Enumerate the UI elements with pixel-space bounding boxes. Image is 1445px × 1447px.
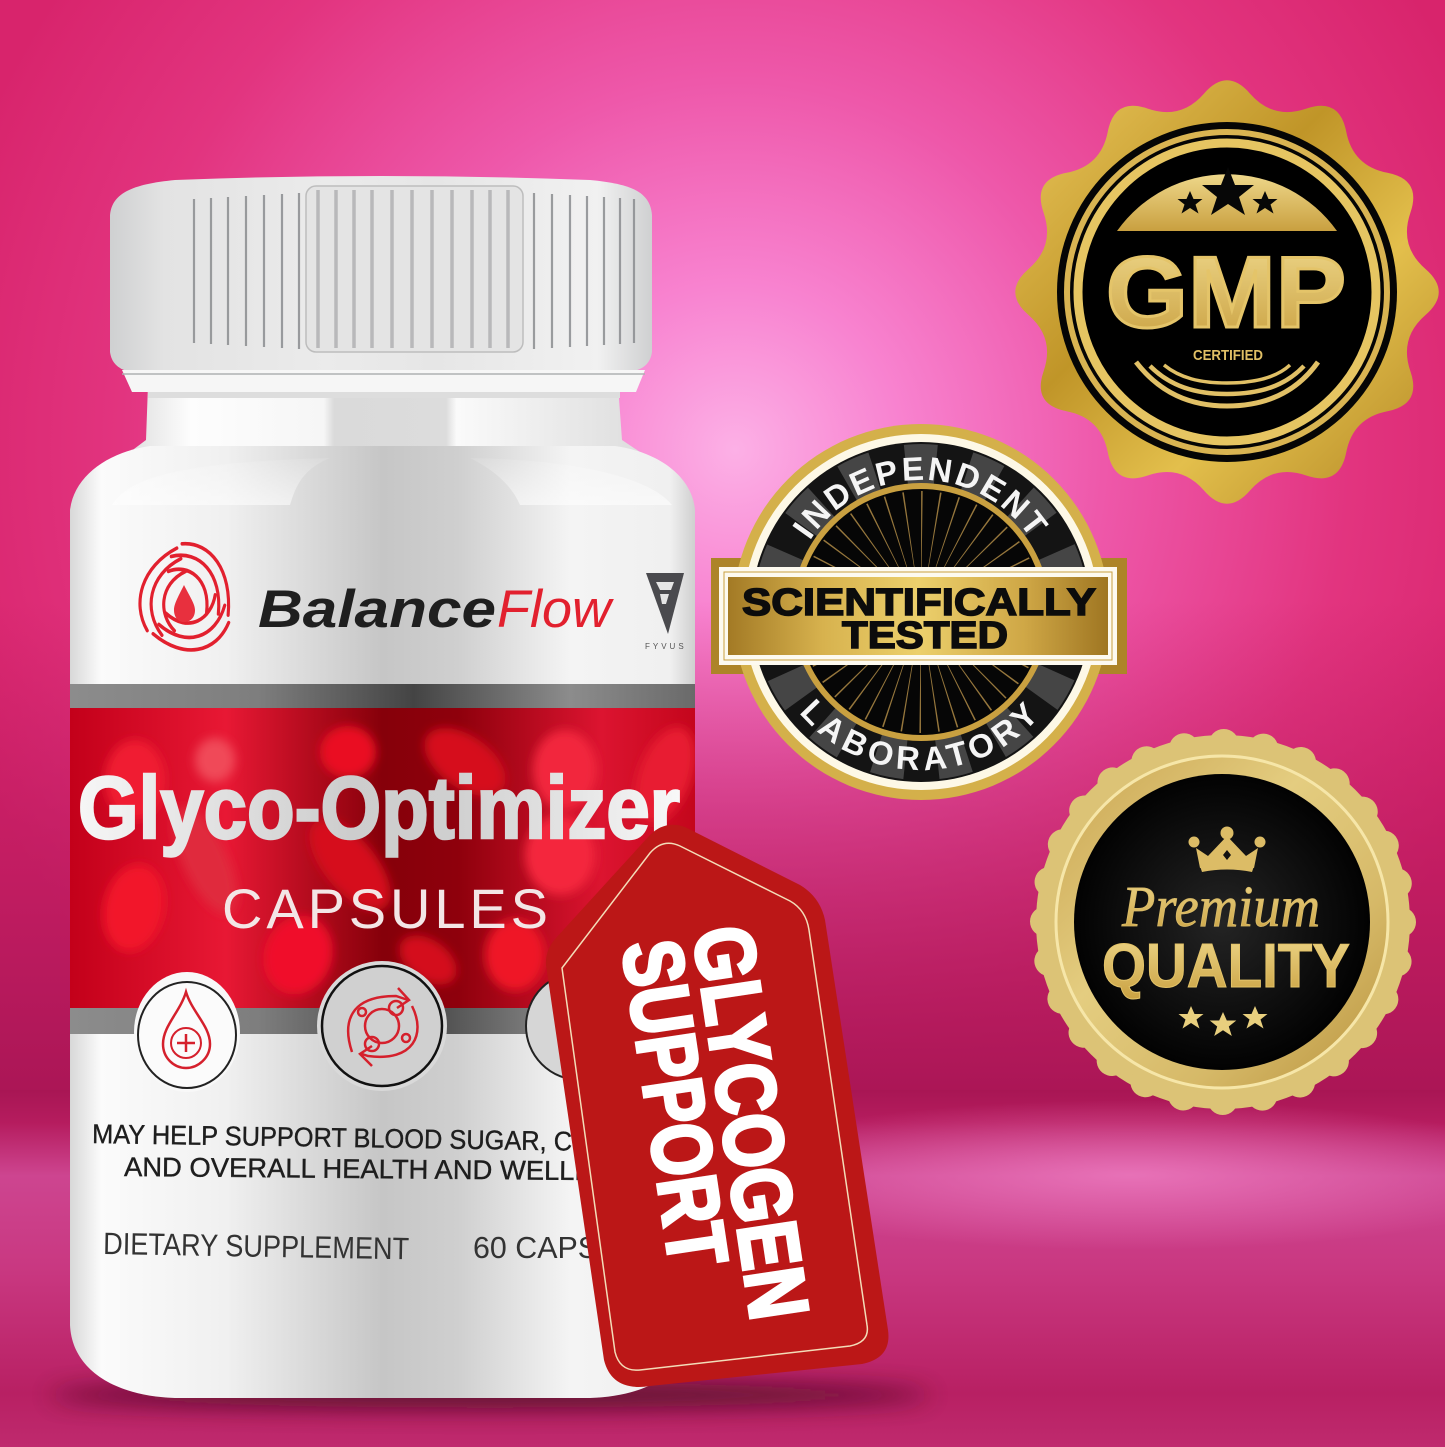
scalloped rim bbox=[1036, 735, 1410, 1109]
arcs bbox=[1136, 362, 1318, 406]
product bottle bbox=[70, 176, 707, 1398]
brand name: Balance bbox=[258, 580, 496, 639]
claim text line 1: MAY HELP SUPPORT BLOOD SUGAR, C bbox=[92, 1119, 572, 1157]
banner line 2: TESTED bbox=[842, 615, 1008, 657]
stars bbox=[1178, 167, 1278, 215]
quality: QUALITY bbox=[1102, 932, 1350, 1001]
sunburst rays bbox=[860, 551, 982, 673]
icon: blood drop plus bbox=[134, 972, 240, 1092]
banner side tabs bbox=[711, 558, 1127, 674]
manufacturer mark bbox=[645, 573, 687, 651]
floor bbox=[0, 1090, 1445, 1447]
bottle shadow bbox=[50, 1382, 930, 1408]
brand logo bbox=[124, 544, 236, 670]
banner line 1: SCIENTIFICALLY bbox=[742, 582, 1096, 624]
icon: metabolism cycle bbox=[317, 961, 447, 1091]
laboratory arc text: LABORATORY bbox=[800, 698, 1034, 770]
cap centre panel bbox=[306, 186, 523, 352]
claim text line 2: AND OVERALL HEALTH AND WELLNESS bbox=[124, 1152, 649, 1187]
grey band top bbox=[70, 684, 695, 709]
product name: Glyco-Optimizer bbox=[78, 758, 680, 857]
bottle body bbox=[70, 446, 695, 1398]
capsule count: 60 CAPS bbox=[473, 1230, 598, 1265]
bottle neck bbox=[130, 385, 640, 452]
tag text line 2: SUPPORT bbox=[604, 934, 746, 1272]
GMP text: GMP bbox=[1106, 237, 1346, 349]
seal edge bbox=[1015, 80, 1439, 504]
badge: GMP certified bbox=[1015, 80, 1439, 504]
bottle shoulder highlight bbox=[112, 458, 672, 505]
certified text: CERTIFIED bbox=[1193, 347, 1263, 364]
red label band bbox=[70, 708, 707, 1010]
icon: third circle, partly hidden bbox=[526, 972, 634, 1080]
tag text line 1: GLYCOGEN bbox=[675, 920, 827, 1325]
icon: crown bbox=[1188, 826, 1266, 872]
brand name accent: Flow bbox=[497, 580, 615, 639]
banner bbox=[719, 567, 1117, 665]
premium script: Premium bbox=[1121, 874, 1320, 939]
top gold segment bbox=[1117, 174, 1337, 231]
dietary supplement: DIETARY SUPPLEMENT bbox=[103, 1226, 409, 1266]
badge: premium quality bbox=[1036, 735, 1410, 1109]
stars bbox=[1178, 1006, 1268, 1036]
badge: scientifically tested bbox=[711, 424, 1127, 800]
product form: CAPSULES bbox=[222, 877, 548, 940]
tag: glycogen support bbox=[546, 825, 888, 1387]
grey band bottom bbox=[70, 1008, 695, 1034]
bottle cap bbox=[110, 176, 652, 398]
manufacturer mark: FYVUS bbox=[645, 642, 687, 651]
independent arc text: INDEPENDENT bbox=[792, 457, 1049, 539]
